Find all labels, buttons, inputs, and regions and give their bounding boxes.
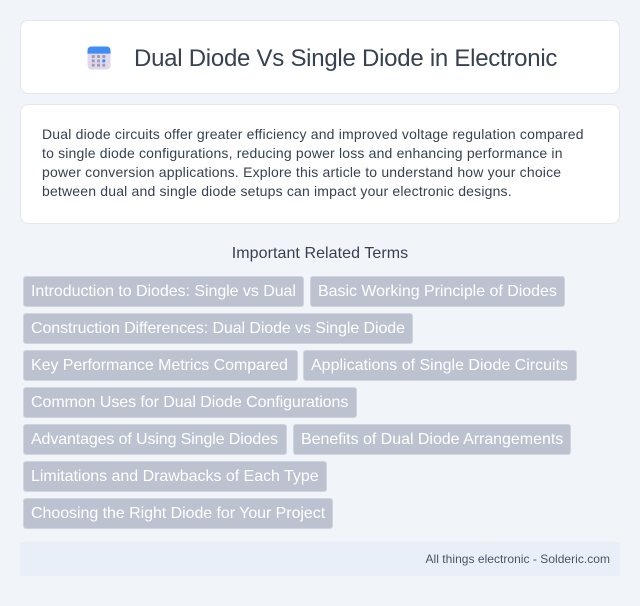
tag: Advantages of Using Single Diodes <box>31 431 278 448</box>
tag <box>23 498 333 529</box>
tag <box>23 313 413 344</box>
tag <box>293 424 571 455</box>
tag: Applications of Single Diode Circuits <box>311 357 568 374</box>
tag: Key Performance Metrics Compared <box>31 357 288 374</box>
intro text: to single diode configurations, reducing power loss and enhancing performance in <box>42 145 563 161</box>
icon: calendar <box>87 46 111 70</box>
tag: Basic Working Principle of Diodes <box>318 283 557 300</box>
tag <box>23 424 287 455</box>
tag: Choosing the Right Diode for Your Project <box>31 505 325 522</box>
header panel <box>20 20 620 94</box>
tag: Common Uses for Dual Diode Configurations <box>31 394 348 411</box>
intro text: power conversion applications. Explore this article to understand how your choice <box>42 164 561 180</box>
tag: Introduction to Diodes: Single vs Dual <box>31 283 296 300</box>
panel: introduction <box>20 104 620 224</box>
intro text <box>42 126 584 199</box>
footer bar <box>20 542 620 576</box>
tag: Construction Differences: Dual Diode vs Single Diode <box>31 320 405 337</box>
tag <box>310 276 565 307</box>
tag <box>23 276 304 307</box>
tag: Benefits of Dual Diode Arrangements <box>301 431 563 448</box>
footer text: All things electronic - Solderic.com <box>426 552 610 566</box>
tag <box>23 461 327 492</box>
intro text: Dual diode circuits offer greater efficiency and improved voltage regulation compared <box>42 126 584 142</box>
tag <box>23 350 298 381</box>
tag <box>303 350 577 381</box>
tag: Limitations and Drawbacks of Each Type <box>31 468 319 485</box>
tag <box>23 387 357 418</box>
heading: related terms: Important Related Terms <box>232 245 408 262</box>
tags group <box>23 276 577 529</box>
title: Dual Diode Vs Single Diode in Electronic <box>134 45 557 72</box>
intro text: between dual and single diode setups can impact your electronic designs. <box>42 183 512 199</box>
